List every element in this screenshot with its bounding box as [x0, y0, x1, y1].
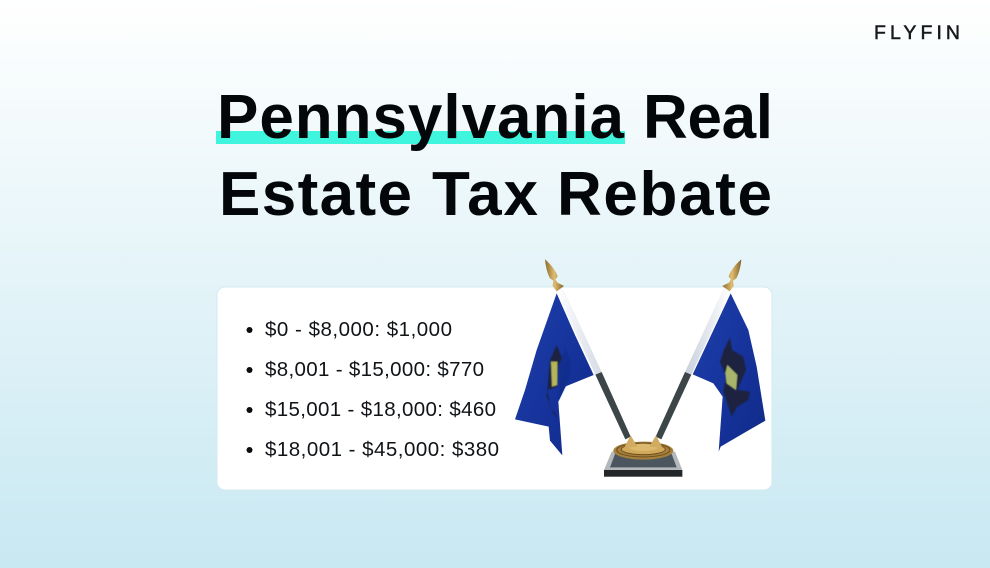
title: Rebate [557, 160, 772, 229]
icon: Pennsylvania desk flags [515, 259, 765, 477]
title: Real [643, 83, 773, 152]
right flag [693, 293, 765, 452]
left flag [515, 293, 594, 455]
title [216, 83, 773, 229]
right pole [656, 259, 741, 439]
title: Pennsylvania [217, 83, 625, 152]
list: rebate brackets: $0 - $8,000: $1,000 [265, 318, 452, 341]
title: Tax [432, 160, 539, 229]
logo: FLYFIN: FLYFIN [874, 22, 960, 44]
panel: rebate amounts card [217, 287, 772, 490]
left pole [545, 259, 631, 439]
list: rebate brackets [246, 318, 499, 461]
title: Estate [219, 160, 412, 229]
title highlight [216, 131, 625, 144]
list: rebate brackets: $15,001 - $18,000: $460 [265, 398, 496, 421]
list: rebate brackets: $8,001 - $15,000: $770 [265, 358, 484, 381]
flag stand base [604, 435, 682, 477]
list: rebate brackets: $18,001 - $45,000: $380 [265, 438, 499, 461]
